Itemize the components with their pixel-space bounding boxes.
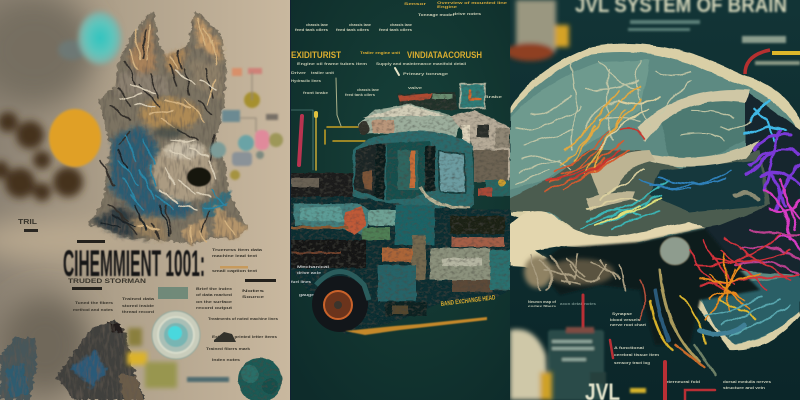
text blocks: small caption text xyxy=(212,269,258,273)
text blocks: stored inside xyxy=(122,304,154,308)
yellow headings: VINDIATAACORUSH xyxy=(407,50,482,60)
top labels: Tonnage model xyxy=(418,13,454,17)
text blocks: Notes xyxy=(242,289,264,293)
purple and magenta wires right xyxy=(735,100,800,275)
top labels: chassis lane xyxy=(349,23,371,27)
top labels: feed tank oilers xyxy=(295,28,328,32)
brain dark right zone xyxy=(700,90,800,275)
dog blue chest xyxy=(110,125,196,218)
dark underside xyxy=(535,228,760,345)
truck cab xyxy=(352,131,474,210)
slanted yellow label: BAND EXCHANGE HEAD xyxy=(440,294,496,308)
cortex veins xyxy=(515,60,750,185)
dog illustration xyxy=(88,9,247,245)
machinery behind the cab xyxy=(358,84,510,196)
blurred top-left specimen xyxy=(506,0,569,61)
text blocks: on the surface xyxy=(196,300,232,304)
annotation small text: blood vessels xyxy=(610,318,640,322)
top labels: feed tank oilers xyxy=(379,28,412,32)
descriptive text rows: Brake xyxy=(484,95,502,99)
text blocks: machine lead text xyxy=(212,254,258,258)
brain central fold zone xyxy=(510,150,770,240)
beige nerves under brain xyxy=(530,255,625,290)
dog muzzle xyxy=(151,142,217,202)
spinal cord xyxy=(640,270,745,375)
descriptive text rows: Supply and maintenance manifold detail xyxy=(376,62,466,66)
text blocks: Trueness item data xyxy=(212,248,264,252)
brain mid cream folds xyxy=(585,150,655,210)
text blocks: Treatments of noted machine lines xyxy=(208,317,278,321)
dog silhouette xyxy=(88,9,247,245)
text blocks: Extended printed letter items xyxy=(212,335,277,339)
text blocks: of data marked xyxy=(196,293,232,297)
yellow tag xyxy=(630,388,646,393)
descriptive text rows: Hydraulic lines xyxy=(291,79,321,83)
annotation small text: nerve root chart xyxy=(610,323,647,327)
blurred lower-left label panel xyxy=(548,327,606,400)
text blocks: thread record xyxy=(122,310,154,314)
truck labels on dark hood: drive axle xyxy=(297,271,321,275)
cyan and blue wires centre xyxy=(580,170,758,230)
annotation small text xyxy=(528,300,771,390)
brain left cortex highlight xyxy=(510,60,650,190)
brain lower cream band xyxy=(510,211,705,268)
top labels: feed tank oilers xyxy=(336,28,369,32)
top labels: Overview of mounted line xyxy=(437,1,507,5)
beige root mass xyxy=(524,256,614,288)
truck front wheel xyxy=(312,272,369,332)
truck labels on dark hood xyxy=(291,265,329,297)
caption bar xyxy=(187,377,229,382)
brain illustration xyxy=(510,44,800,375)
right upper lobe xyxy=(660,91,755,160)
text blocks: Source xyxy=(242,295,264,299)
annotation small text: Synapse xyxy=(612,312,632,316)
top labels xyxy=(295,1,507,32)
annotation small text: cortex fibers xyxy=(528,304,557,308)
descriptive text rows: feed tank oilers xyxy=(345,93,375,97)
small dog silhouette icon xyxy=(214,332,236,342)
annotation small text: structure and vein xyxy=(723,386,766,390)
text blocks: TRIL xyxy=(18,219,38,226)
text blocks: Trained data xyxy=(122,297,156,301)
panel: dog infographic xyxy=(0,0,290,400)
truck labels on dark hood: fuel lines xyxy=(291,280,311,284)
text blocks xyxy=(18,219,278,362)
small dog illustration xyxy=(56,320,146,400)
blurred colour chart xyxy=(127,328,177,388)
brain outer shell xyxy=(510,44,800,350)
text blocks: Tuned the fibers xyxy=(75,301,113,305)
brain cortex xyxy=(510,52,800,344)
panel: truck infographic xyxy=(291,0,510,400)
annotation small text: A functional xyxy=(614,346,644,350)
text blocks: Index notes xyxy=(212,358,240,362)
icon: blurred teal orb xyxy=(58,10,123,66)
icon: orange orb xyxy=(49,109,101,167)
truck labels on dark hood: Mechanical xyxy=(297,265,329,269)
descriptive text rows: Engine oil frame tubes item xyxy=(297,62,368,66)
dog right blue fur xyxy=(200,190,232,218)
dog brow xyxy=(140,98,200,130)
annotation small text: dorsal medulla nerves xyxy=(723,380,771,384)
eye-like globe xyxy=(660,237,690,265)
top labels: chassis lane xyxy=(390,23,412,27)
descriptive text rows: chassis lane xyxy=(357,88,379,92)
top labels: drive notes xyxy=(453,12,481,16)
icon: blurred brown clusters xyxy=(0,112,83,201)
descriptive text rows: Driver xyxy=(291,71,307,75)
yellow headings xyxy=(292,52,482,58)
dog paws xyxy=(180,205,247,245)
text blocks: method and notes xyxy=(73,308,113,312)
annotation small text: cerebral tissue item xyxy=(614,353,660,357)
red orange wires lower right xyxy=(680,235,800,345)
annotation small text: Interneural fold xyxy=(664,380,701,384)
descriptive text rows: Primary tonnage xyxy=(403,72,448,76)
icon: concentric teal ring xyxy=(152,311,200,359)
pointer lines and gauges xyxy=(291,68,399,170)
yellow headings: Trailer engine unit xyxy=(360,51,401,55)
red connector lines xyxy=(583,295,715,400)
truck labels on dark hood: gauge xyxy=(299,293,314,297)
top labels: chassis lane xyxy=(306,23,328,27)
blurred top captions xyxy=(628,20,800,65)
blurred cream specimen xyxy=(510,329,552,400)
top labels: Sensor xyxy=(404,2,427,6)
dog lower body xyxy=(92,205,148,238)
panel: brain infographic xyxy=(506,0,800,400)
red and orange wires left xyxy=(545,85,660,210)
cropped dog illustration xyxy=(0,338,37,400)
yellow headings: EXIDITURIST xyxy=(291,50,341,60)
yellow chassis strip xyxy=(345,317,487,335)
icon: teal tree xyxy=(238,358,282,400)
connector and yellow tag xyxy=(745,50,800,74)
infographic nodes right of dog xyxy=(210,68,283,180)
text blocks: Trained fibers mark xyxy=(206,347,250,351)
subtitle: TRUDED STORMAN xyxy=(68,278,146,285)
upper cream lobe outline xyxy=(640,140,760,166)
dog eye shade xyxy=(154,126,182,138)
text blocks: record output xyxy=(196,306,233,310)
panel: dog infographic: CIHEMMIENT 1001: xyxy=(63,243,205,284)
dog ear colouring xyxy=(115,15,222,100)
descriptive text rows: valve xyxy=(408,86,422,90)
annotation small text: Neuron map of xyxy=(528,300,557,304)
lower right bulge xyxy=(700,275,800,344)
descriptive text rows: front brake xyxy=(303,91,328,95)
annotation small text: axon detail notes xyxy=(560,302,596,306)
text blocks: Brief the index xyxy=(196,287,232,291)
descriptive text rows: trailer unit xyxy=(311,71,335,75)
tank on the roof xyxy=(358,104,460,138)
dog fur strokes xyxy=(100,18,235,242)
dog nose xyxy=(187,168,211,186)
top labels: Engine xyxy=(437,5,457,9)
annotation small text: sensory tract log xyxy=(614,361,651,365)
truck hood and engine xyxy=(291,173,510,335)
descriptive text rows xyxy=(291,62,502,99)
